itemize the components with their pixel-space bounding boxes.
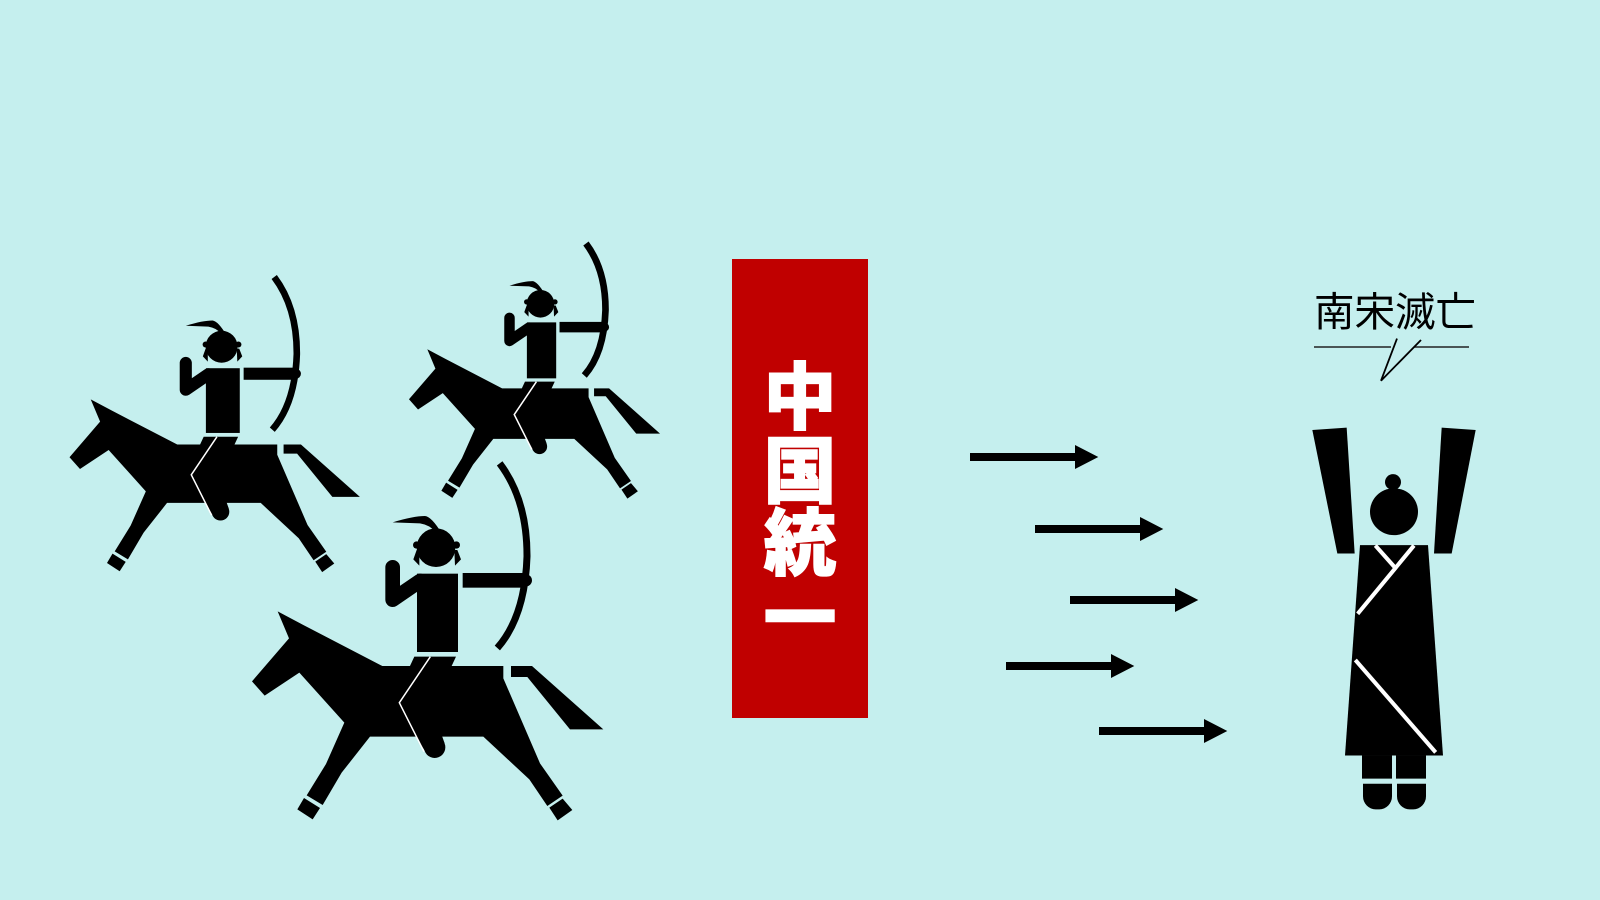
heading: China unification xyxy=(764,358,836,660)
callout: Southern Song falls: 南宋滅亡 xyxy=(1314,289,1476,335)
figure: surrendering Song person with raised arms xyxy=(1312,428,1476,809)
heading: China unification: 一 xyxy=(764,579,836,660)
arrow 1 xyxy=(970,445,1098,469)
heading: China unification: 中 xyxy=(764,358,836,439)
arrow 4 xyxy=(1006,654,1134,678)
panel: red banner xyxy=(732,259,868,718)
heading: China unification: 統 xyxy=(764,504,836,585)
rider: mounted archer bottom xyxy=(252,463,603,820)
arrow 2 xyxy=(1035,517,1163,541)
rider: mounted archer top right xyxy=(409,244,660,499)
arrow 5 xyxy=(1099,719,1227,743)
heading: China unification: 国 xyxy=(764,432,836,513)
arrow 3 xyxy=(1070,588,1198,612)
callout: Southern Song falls xyxy=(1314,289,1476,381)
rider: mounted archer top left xyxy=(70,277,360,572)
